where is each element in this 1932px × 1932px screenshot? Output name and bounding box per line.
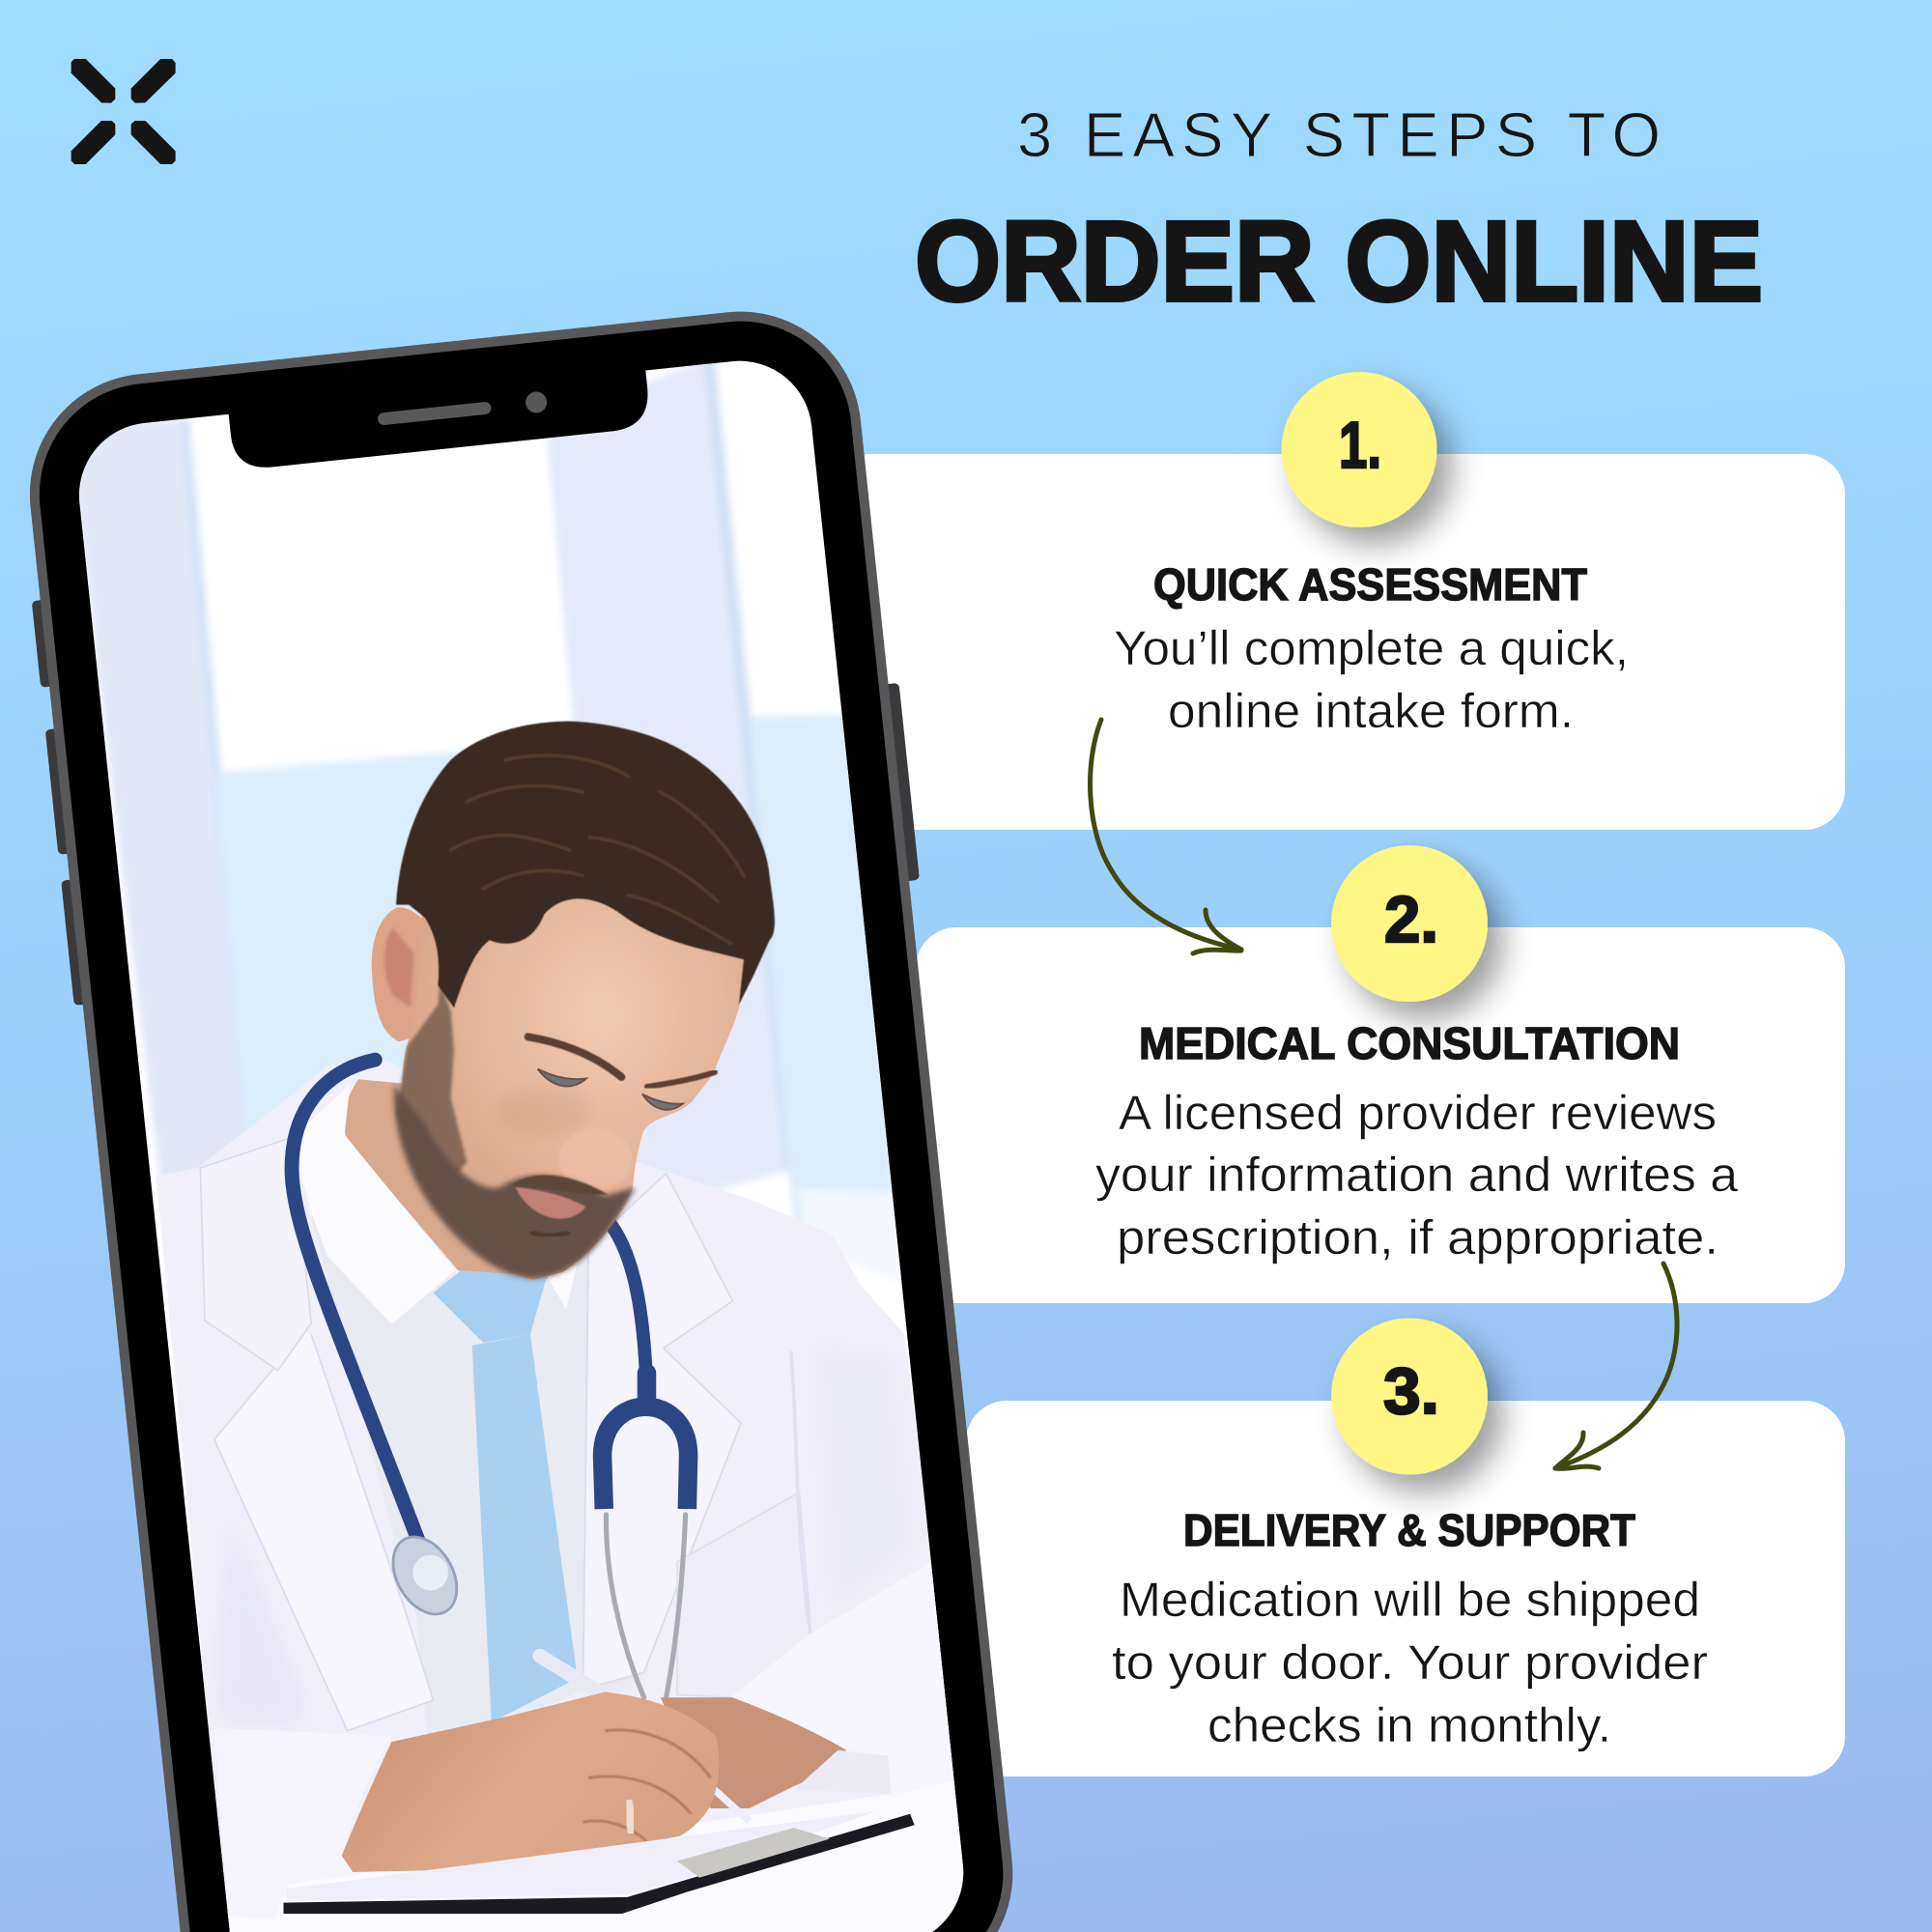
heading 2: MEDICAL CONSULTATION bbox=[1139, 1018, 1680, 1068]
phone body bbox=[10, 298, 1030, 1932]
pen bbox=[540, 1656, 605, 1696]
cheek shade bbox=[506, 1090, 587, 1129]
face bbox=[403, 889, 745, 1280]
body 1: online intake form. bbox=[1168, 684, 1574, 738]
lab coat bbox=[156, 1057, 960, 1932]
nose bbox=[560, 1139, 631, 1188]
body 2: your information and writes a bbox=[1095, 1148, 1738, 1202]
title bbox=[915, 99, 1763, 326]
stubble on sideburn and jaw bbox=[394, 960, 469, 1173]
ear bbox=[371, 907, 421, 1041]
body 1 bbox=[1114, 621, 1629, 738]
number 3: 3. bbox=[1383, 1354, 1439, 1428]
main heading: ORDER ONLINE bbox=[915, 198, 1763, 326]
beard and mouth bbox=[394, 1085, 636, 1278]
body 1: You’ll complete a quick, bbox=[1114, 621, 1629, 675]
notch bbox=[228, 360, 651, 471]
coat shading bbox=[228, 1573, 293, 1716]
badge 2 bbox=[1331, 845, 1488, 1002]
heading 1: QUICK ASSESSMENT bbox=[1153, 559, 1587, 610]
logo bbox=[72, 60, 175, 163]
body 3 bbox=[1112, 1573, 1708, 1752]
writing hand bbox=[342, 1691, 719, 1872]
phone mockup bbox=[29, 311, 1012, 1932]
panel: step 2 card bbox=[916, 927, 1845, 1303]
number 2: 2. bbox=[1384, 883, 1438, 956]
camera bbox=[525, 390, 548, 414]
window and curtains bbox=[68, 357, 903, 1285]
body 3: to your door. Your provider bbox=[1112, 1635, 1708, 1690]
eyebrows and eyes bbox=[528, 1037, 621, 1077]
body 2 bbox=[1095, 1086, 1738, 1264]
phone screen photo of doctor bbox=[79, 361, 964, 1932]
body 2: A licensed provider reviews bbox=[1119, 1086, 1717, 1140]
clipboard bbox=[284, 1814, 915, 1914]
arms desk and clipboard bbox=[200, 1562, 1014, 1932]
neck bbox=[345, 1079, 549, 1279]
hair bbox=[396, 722, 775, 1008]
badge 1 bbox=[1281, 372, 1437, 527]
right forearm bbox=[661, 1697, 846, 1808]
right sleeve bbox=[727, 1562, 960, 1798]
badge 3 bbox=[1331, 1318, 1488, 1474]
shirt bbox=[311, 1095, 588, 1742]
subtitle line: 3 EASY STEPS TO bbox=[1017, 99, 1661, 170]
body 3: checks in monthly. bbox=[1208, 1698, 1611, 1752]
head bbox=[372, 722, 775, 1280]
body 3: Medication will be shipped bbox=[1120, 1573, 1700, 1627]
stethoscope bbox=[292, 1060, 689, 1697]
desk bbox=[228, 1780, 964, 1932]
panel: step 1 card bbox=[831, 454, 1845, 830]
panel: step 3 card bbox=[966, 1401, 1845, 1776]
step 2 bbox=[1095, 845, 1738, 1264]
arrow: step 2 to step 3 bbox=[1555, 1264, 1677, 1468]
collar bbox=[292, 1085, 455, 1324]
necktie bbox=[433, 1270, 547, 1343]
arrow: step 1 to step 2 bbox=[1091, 720, 1241, 953]
speaker bbox=[377, 401, 492, 426]
body 2: prescription, if appropriate. bbox=[1117, 1210, 1719, 1264]
step 1 bbox=[1114, 372, 1629, 738]
heading 3: DELIVERY & SUPPORT bbox=[1183, 1505, 1635, 1555]
left sleeve bbox=[220, 1729, 290, 1733]
step 3 bbox=[1112, 1318, 1708, 1752]
number 1: 1. bbox=[1339, 409, 1381, 482]
